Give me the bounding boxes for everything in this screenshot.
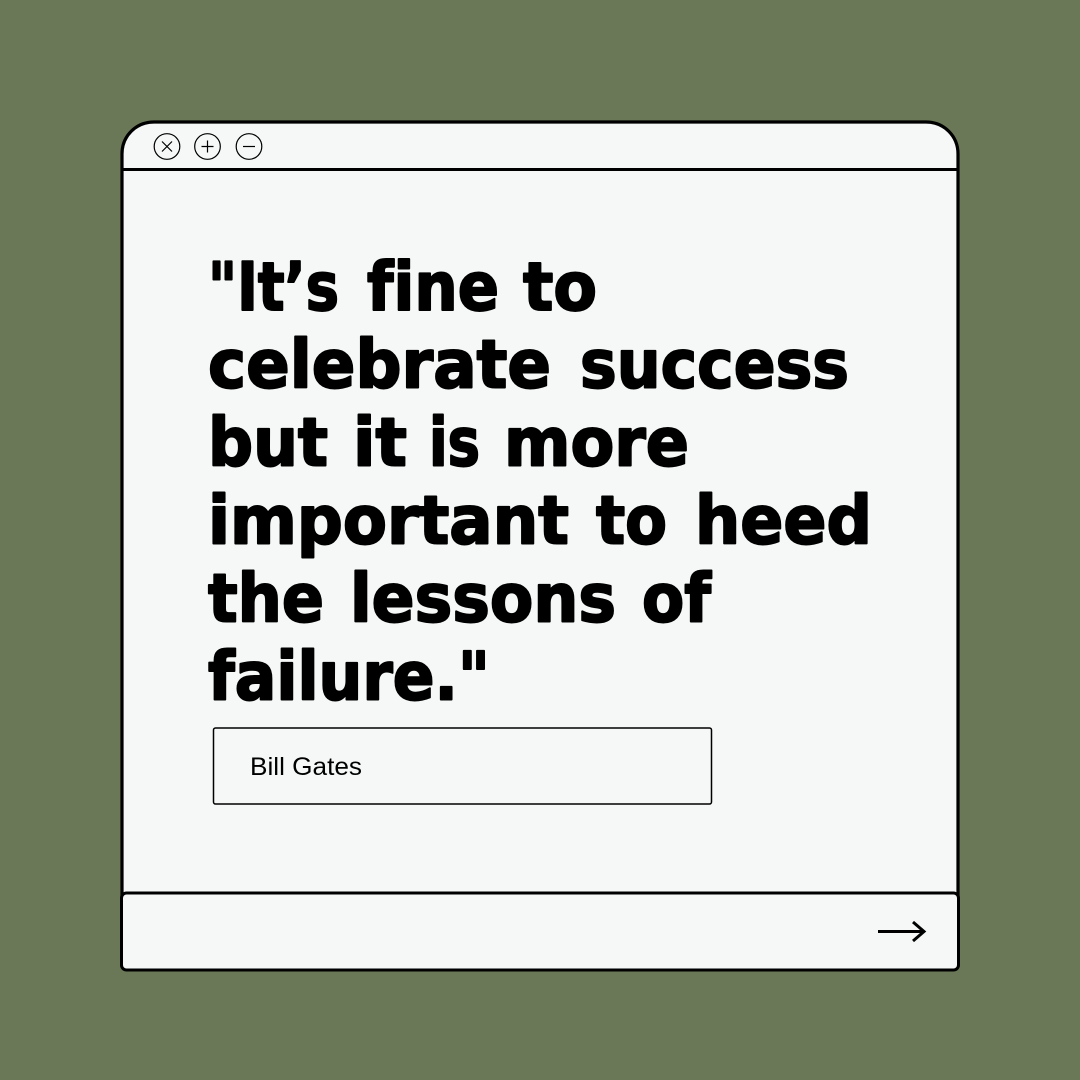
window title bar divider — [122, 168, 958, 171]
window control icons — [154, 134, 262, 159]
quote heading: to — [596, 482, 667, 560]
quote heading: more — [504, 404, 689, 482]
bottom bar panel — [122, 893, 958, 970]
icon: close — [154, 134, 180, 159]
attribution box — [214, 728, 712, 804]
icon: plus — [195, 134, 220, 159]
icon: right arrow — [878, 922, 924, 941]
quote heading: to — [523, 248, 597, 326]
quote heading: heed — [695, 482, 872, 560]
quote heading: lessons — [350, 560, 616, 638]
quote heading — [208, 248, 872, 716]
quote heading: failure." — [208, 638, 490, 716]
quote heading: "It’s — [208, 248, 339, 326]
quote heading: of — [642, 560, 712, 638]
quote heading: it — [353, 404, 407, 482]
quote heading: the — [208, 560, 324, 638]
quote heading: is — [429, 404, 480, 482]
browser window panel — [122, 122, 958, 930]
quote heading: success — [580, 326, 849, 404]
quote heading: celebrate — [208, 326, 551, 404]
quote heading: but — [208, 404, 328, 482]
icon: minus — [236, 134, 262, 159]
quote heading: important — [208, 482, 569, 560]
quote heading: fine — [367, 248, 499, 326]
attribution text: Bill Gates — [250, 753, 362, 781]
